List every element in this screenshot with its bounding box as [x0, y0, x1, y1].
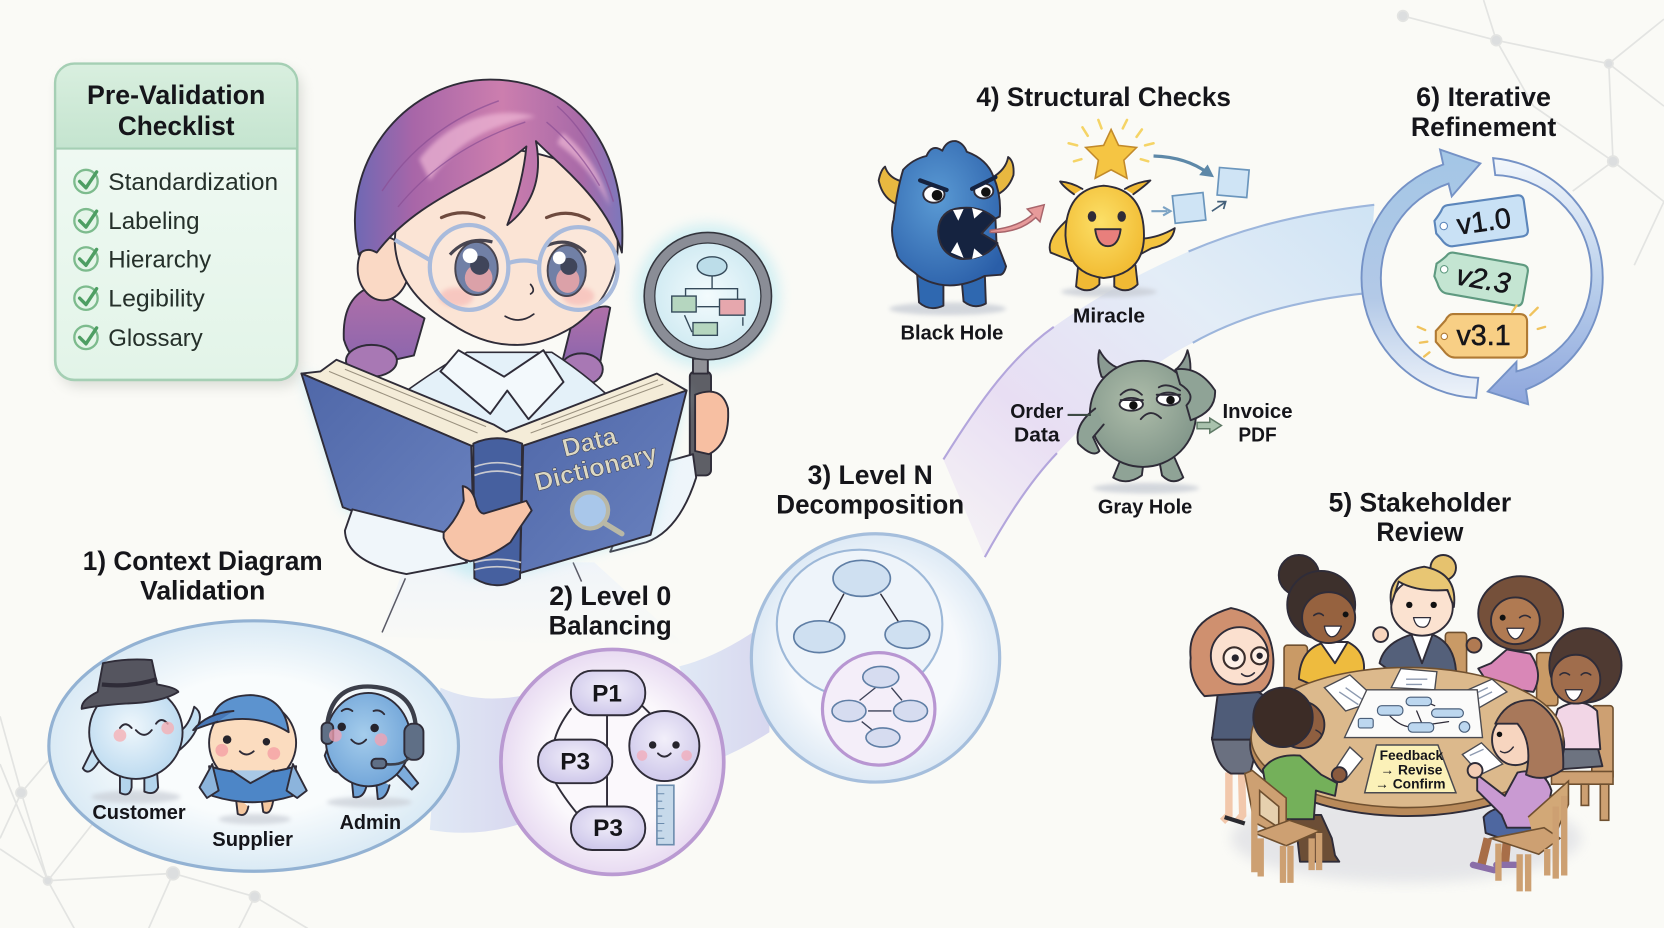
background network: top right — [1398, 0, 1664, 265]
feedback note: Feedback — [1380, 748, 1444, 763]
panel: level N bubble — [751, 534, 1000, 782]
flow ribbon: level N to refinement — [943, 205, 1374, 557]
label: order data: Data — [1014, 424, 1060, 446]
checklist title: Checklist — [118, 111, 235, 141]
nose and mouth — [505, 284, 534, 320]
person: glasses woman — [1190, 608, 1273, 823]
checklist header — [55, 64, 297, 149]
label: black hole: Black Hole — [900, 323, 1003, 345]
checklist items — [74, 169, 278, 352]
glasses — [395, 225, 618, 310]
process P3 upper: P3 — [560, 748, 590, 775]
heading: step 2 — [549, 581, 672, 641]
gray hole face — [1120, 385, 1180, 411]
person: woman with bun — [1279, 555, 1364, 686]
lab coat — [380, 562, 690, 649]
gray hole input line — [1068, 414, 1091, 416]
collar — [440, 350, 564, 419]
tag: v3.1: v3.1 — [1456, 320, 1511, 352]
label: miracle: Miracle — [1073, 306, 1145, 328]
chair: front left — [1245, 770, 1320, 883]
cycle arrow: right — [1488, 158, 1603, 404]
flow ribbon: context to level 0 — [430, 688, 525, 833]
eyebrows — [441, 213, 589, 220]
label: order data: Order — [1010, 401, 1063, 423]
heading: step 5: Review — [1376, 517, 1464, 547]
label: admin: Admin — [340, 812, 401, 834]
feedback note — [1365, 745, 1456, 793]
gray hole legs — [1113, 451, 1183, 481]
checklist items: Standardization — [108, 169, 278, 196]
eyes — [450, 240, 586, 296]
lower decomposition — [822, 653, 935, 765]
illustration: girl with data dictionary — [301, 80, 780, 649]
character: admin — [322, 686, 423, 808]
left sleeve — [345, 509, 467, 574]
heading: step 6: Refinement — [1411, 112, 1556, 142]
left hand — [444, 486, 532, 561]
hair — [355, 80, 622, 255]
face — [395, 149, 618, 345]
central diagram sheet — [1345, 690, 1483, 738]
process P3 lower: P3 — [593, 815, 623, 842]
label: invoice pdf — [1223, 401, 1293, 446]
pigtails — [344, 287, 610, 385]
person: green shirt man — [1253, 688, 1347, 862]
tag: v1.0: v1.0 — [1455, 202, 1513, 242]
black hole body — [892, 141, 1006, 285]
monster: gray hole — [1068, 350, 1221, 493]
heading: step 3 — [776, 460, 964, 520]
monster: miracle — [1050, 180, 1175, 297]
black hole feet — [917, 271, 986, 308]
book glow — [301, 374, 687, 578]
label: invoice pdf: Invoice — [1223, 401, 1293, 423]
panel: context diagram bubble — [49, 621, 458, 871]
heading: step 3: Decomposition — [776, 490, 964, 520]
person: curly hair woman — [1467, 576, 1563, 692]
arrow: black hole to miracle — [990, 205, 1044, 232]
checklist items: Hierarchy — [108, 246, 212, 273]
heading: step 6: 6) Iterative — [1416, 82, 1551, 112]
heading: step 5: 5) Stakeholder — [1329, 487, 1511, 517]
shirt — [401, 352, 607, 446]
ear — [358, 237, 409, 300]
heading: step 1 — [83, 546, 323, 606]
ruler — [657, 785, 674, 845]
book title — [525, 414, 661, 497]
label: supplier: Supplier — [212, 829, 293, 851]
right hand — [695, 392, 728, 454]
process P1: P1 — [592, 680, 622, 707]
heading: step 2: 2) Level 0 — [549, 581, 671, 611]
heading: step 3: 3) Level N — [808, 460, 933, 490]
checklist items: Legibility — [108, 286, 206, 313]
heading: step 2: Balancing — [549, 611, 672, 641]
process P1 — [571, 671, 645, 715]
tag: v2.3: v2.3 — [1454, 260, 1513, 300]
heading: step 1: Validation — [140, 576, 265, 606]
person: blond man — [1373, 555, 1456, 675]
label: invoice pdf: PDF — [1238, 424, 1277, 446]
tag: v1.0 — [1433, 195, 1529, 248]
level 0 connectors — [554, 706, 656, 815]
book right cover — [520, 391, 687, 573]
miracle output boxes and arrows — [1151, 156, 1249, 223]
gray hole output arrow — [1197, 418, 1221, 433]
black hole horns — [879, 157, 1014, 207]
tag: v2.3 — [1432, 250, 1529, 307]
black hole mouth — [938, 208, 998, 259]
character: supplier — [193, 695, 307, 825]
cycle arrow: left — [1362, 150, 1480, 398]
heading: step 4: 4) Structural Checks — [976, 82, 1231, 112]
gray hole horns — [1098, 350, 1190, 382]
book spine — [473, 438, 522, 585]
tag: v3.1 — [1418, 306, 1545, 358]
gray hole arms — [1077, 369, 1215, 453]
chair: front right — [1491, 781, 1568, 891]
right sleeve — [610, 454, 696, 552]
right chair — [1551, 706, 1613, 820]
book title: Data — [559, 422, 621, 463]
process P3 upper — [538, 740, 612, 783]
heading: step 1: 1) Context Diagram — [83, 546, 323, 576]
round table — [1250, 667, 1564, 816]
monster: black hole — [879, 141, 1014, 315]
person: right woman — [1549, 628, 1622, 769]
feedback note: → Revise — [1380, 763, 1443, 778]
feedback note: → Confirm — [1375, 776, 1446, 791]
checklist title: Pre-Validation — [87, 80, 265, 110]
magnifying glass — [636, 224, 780, 475]
book left cover — [301, 374, 474, 557]
black hole eyes — [920, 177, 995, 203]
label: customer: Customer — [92, 802, 186, 824]
illustration: stakeholder review table — [1190, 555, 1622, 891]
label: order data — [1010, 401, 1063, 446]
hair highlight — [382, 101, 613, 207]
panel: pre-validation checklist — [55, 64, 301, 386]
upper decomposition — [777, 550, 942, 698]
label: gray hole: Gray Hole — [1098, 497, 1192, 519]
flow ribbon: level 0 to level N — [679, 621, 769, 760]
book title: Dictionary — [532, 439, 661, 497]
book pages — [301, 360, 687, 451]
character: customer — [82, 659, 200, 803]
checklist title — [87, 80, 265, 141]
floor shadow — [1231, 794, 1581, 883]
star: miracle — [1069, 120, 1154, 178]
back chairs — [1284, 632, 1558, 706]
person: brown hair woman — [1468, 700, 1563, 870]
process P3 lower — [571, 806, 645, 850]
checklist items: Glossary — [108, 325, 204, 352]
smiling process — [629, 711, 699, 781]
heading: step 5 — [1329, 487, 1511, 547]
documents on table — [1324, 669, 1507, 780]
book cover magnifier icon — [572, 492, 622, 534]
panel: level 0 bubble — [501, 649, 724, 874]
checklist items: Labeling — [108, 208, 200, 235]
magnifier mini diagram — [672, 257, 745, 335]
iterative refinement cycle — [1362, 150, 1603, 404]
blush — [439, 287, 594, 307]
background network: bottom left — [0, 716, 308, 928]
heading: step 6 — [1411, 82, 1556, 142]
